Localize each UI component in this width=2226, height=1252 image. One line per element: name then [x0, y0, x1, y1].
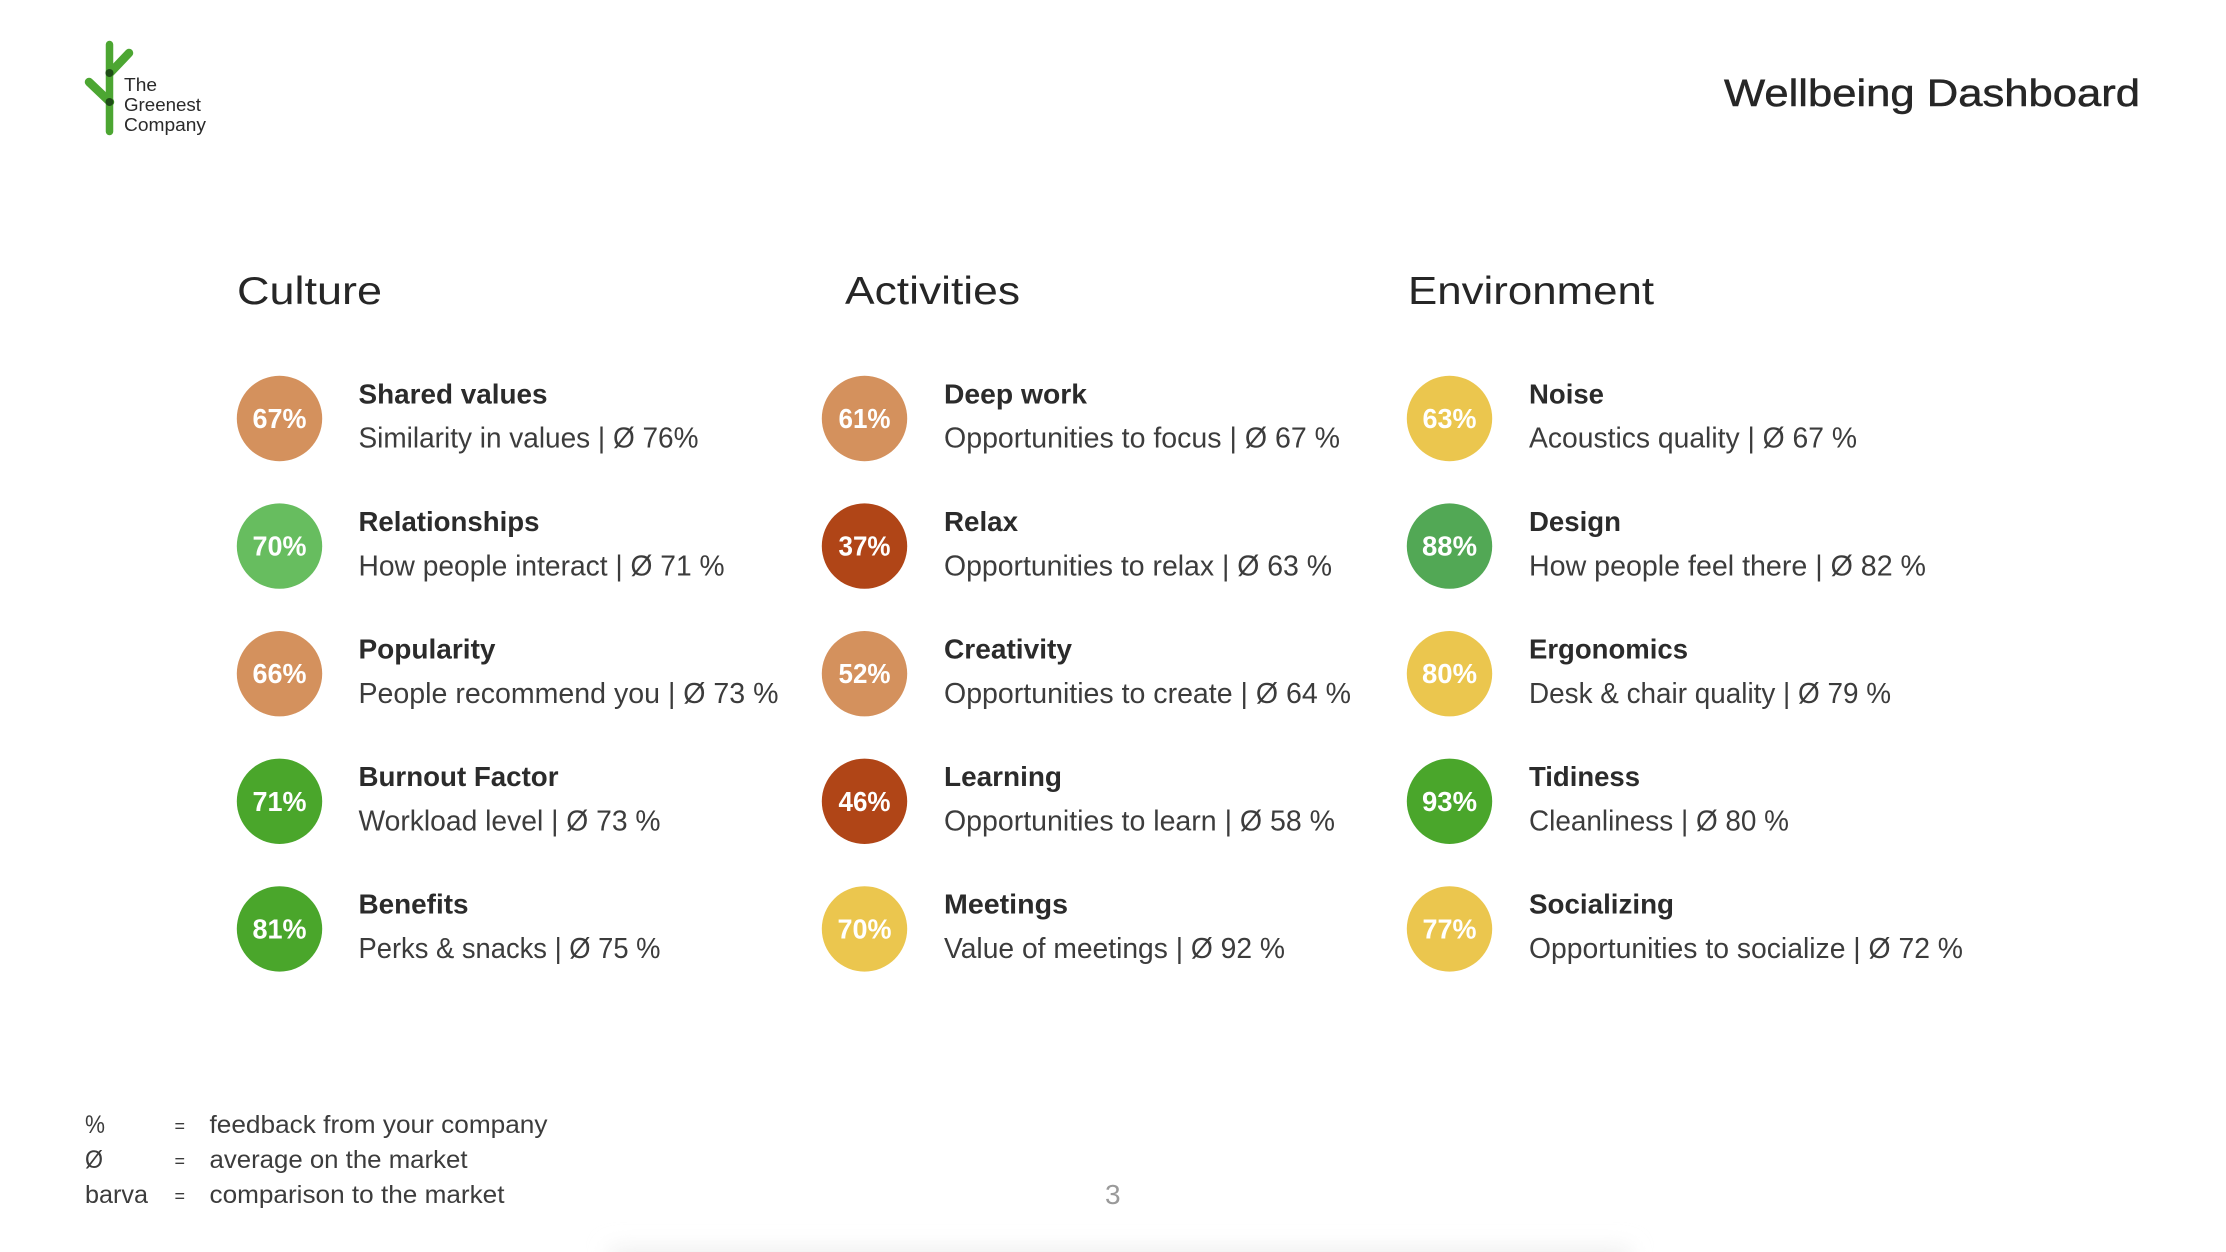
- metric: noise: 63%: [1422, 403, 1477, 434]
- panel: environment: [1407, 270, 1963, 972]
- legend: =: [174, 1186, 185, 1206]
- metric: relationships: Relationships: [358, 506, 540, 537]
- legend: feedback from your company: [210, 1111, 548, 1139]
- metric: relax: 37%: [838, 531, 891, 562]
- legend: comparison to the market: [210, 1181, 505, 1209]
- legend: Ø: [85, 1146, 103, 1174]
- metric: design: Design: [1529, 506, 1621, 537]
- metric: popularity: [237, 631, 779, 716]
- metric: shared values: [237, 376, 699, 461]
- logo text: Greenest: [124, 95, 201, 115]
- metric: deep work: [822, 376, 1340, 461]
- metric: ergonomics: Desk & chair quality | Ø 79 %: [1529, 678, 1891, 710]
- metric: ergonomics: Ergonomics: [1529, 634, 1688, 664]
- metric: design: How people feel there | Ø 82 %: [1529, 550, 1926, 582]
- metric: burnout factor: Workload level | Ø 73 %: [358, 806, 660, 838]
- metric: shared values: Shared values: [358, 378, 548, 409]
- legend: %: [85, 1111, 105, 1139]
- metric: benefits: Benefits: [358, 889, 468, 920]
- metric: meetings: Meetings: [944, 889, 1068, 920]
- metric: meetings: Value of meetings | Ø 92 %: [944, 933, 1285, 965]
- metric: relationships: 70%: [252, 531, 307, 562]
- logo: [89, 44, 206, 135]
- metric: tidiness: [1407, 759, 1789, 844]
- metric: socializing: Opportunities to socialize | Ø 72 %: [1529, 933, 1963, 965]
- legend: [85, 1111, 548, 1209]
- metric: creativity: Opportunities to create | Ø 64 %: [944, 678, 1351, 710]
- metric: meetings: 70%: [838, 913, 892, 944]
- metric: noise: Acoustics quality | Ø 67 %: [1529, 423, 1857, 455]
- metric: learning: Learning: [944, 761, 1062, 792]
- metric: tidiness: 93%: [1422, 786, 1477, 817]
- metric: relationships: How people interact | Ø 71 %: [358, 550, 724, 582]
- metric: shared values: 67%: [252, 403, 307, 434]
- heading: activities: Activities: [845, 270, 1020, 313]
- metric: socializing: Socializing: [1529, 889, 1674, 920]
- metric: creativity: Creativity: [944, 634, 1072, 664]
- page number: 3: [1105, 1179, 1121, 1210]
- icon: green plant: [89, 44, 129, 132]
- metric: noise: [1407, 376, 1857, 461]
- legend: average on the market: [210, 1146, 468, 1174]
- metric: burnout factor: 71%: [252, 786, 307, 817]
- legend: =: [174, 1116, 185, 1136]
- metric: noise: Noise: [1529, 378, 1604, 409]
- metric: deep work: Deep work: [944, 378, 1087, 409]
- metric: burnout factor: [237, 759, 661, 844]
- metric: benefits: 81%: [252, 913, 307, 944]
- metric: learning: Opportunities to learn | Ø 58 %: [944, 806, 1335, 838]
- legend: barva: [85, 1181, 148, 1209]
- metric: deep work: 61%: [838, 403, 891, 434]
- metric: design: 88%: [1422, 531, 1477, 562]
- metric: deep work: Opportunities to focus | Ø 67 %: [944, 423, 1340, 455]
- metric: popularity: People recommend you | Ø 73 %: [358, 678, 778, 710]
- metric: popularity: Popularity: [358, 634, 496, 664]
- logo text: The: [124, 75, 157, 95]
- metric: burnout factor: Burnout Factor: [358, 761, 559, 792]
- metric: meetings: [822, 886, 1285, 972]
- metric: benefits: [237, 886, 661, 972]
- metric: benefits: Perks & snacks | Ø 75 %: [358, 933, 660, 965]
- logo text: Company: [124, 115, 206, 135]
- metric: tidiness: Tidiness: [1529, 761, 1640, 792]
- metric: ergonomics: 80%: [1422, 658, 1477, 689]
- metric: creativity: [822, 631, 1351, 716]
- legend: =: [174, 1151, 185, 1171]
- metric: relax: Opportunities to relax | Ø 63 %: [944, 550, 1332, 582]
- metric: socializing: 77%: [1422, 913, 1477, 944]
- metric: learning: 46%: [838, 786, 891, 817]
- metric: relax: Relax: [944, 506, 1018, 537]
- heading: culture: Culture: [237, 270, 382, 313]
- metric: learning: [822, 759, 1335, 844]
- panel: activities: [822, 270, 1351, 972]
- metric: tidiness: Cleanliness | Ø 80 %: [1529, 806, 1789, 838]
- heading: environment: Environment: [1408, 270, 1654, 313]
- metric: creativity: 52%: [838, 658, 891, 689]
- metric: ergonomics: [1407, 631, 1891, 716]
- logo text: [124, 75, 206, 135]
- metric: design: [1407, 503, 1926, 589]
- metric: shared values: Similarity in values | Ø 76%: [358, 423, 698, 455]
- metric: socializing: [1407, 886, 1963, 972]
- metric: relationships: [237, 503, 725, 589]
- bottom shadow: [610, 1248, 1630, 1252]
- metric: popularity: 66%: [252, 658, 307, 689]
- title: Wellbeing Dashboard: [1724, 73, 2140, 115]
- panel: culture: [237, 270, 779, 972]
- metric: relax: [822, 503, 1332, 589]
